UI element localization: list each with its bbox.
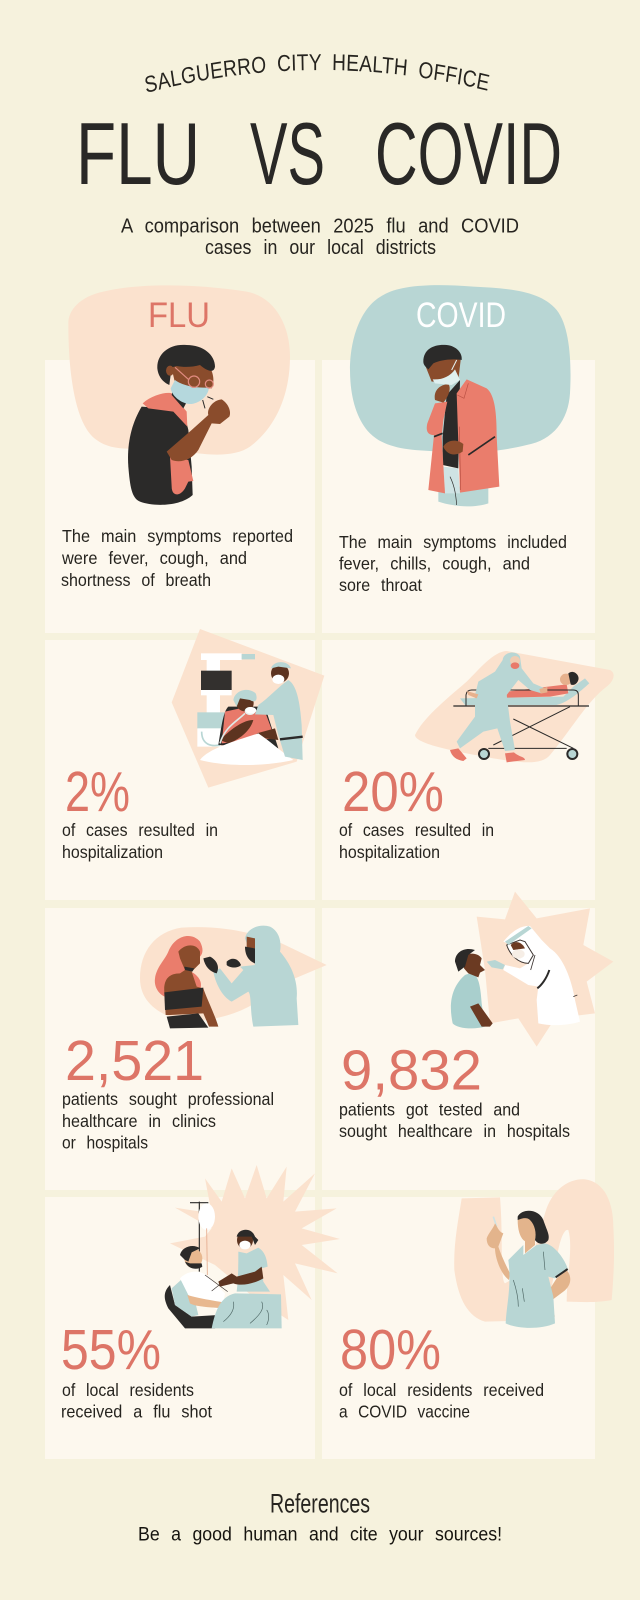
stat: flu shot: [61, 1318, 212, 1422]
illustration: person with covid symptoms: [350, 285, 571, 506]
stat: flu patients: healthcare in clinics: [62, 1111, 216, 1131]
subtitle: cases in our local districts: [205, 237, 436, 259]
column label: covid: COVID: [416, 296, 506, 335]
stat: flu shot: received a flu shot: [61, 1402, 212, 1422]
references heading: References: [270, 1488, 370, 1518]
text: covid symptoms: [339, 532, 567, 595]
stat: covid patients: sought healthcare in hospitals: [339, 1121, 570, 1141]
text: covid symptoms: sore throat: [339, 575, 422, 595]
stat: covid hospitalization: of cases resulted in: [339, 820, 494, 840]
text: covid symptoms: fever, chills, cough, and: [339, 554, 530, 574]
subtitle: A comparison between 2025 flu and COVID: [121, 216, 519, 238]
stat: covid patients: patients got tested and: [339, 1100, 520, 1120]
stat: covid patients: [339, 1038, 570, 1141]
illustration: patient with IV and nurse: [165, 1165, 340, 1328]
stat: covid vaccine: 80%: [340, 1318, 441, 1382]
title: VS: [250, 104, 325, 203]
stat: flu patients: 2,521: [65, 1029, 204, 1093]
title: [76, 104, 562, 203]
stat: flu patients: patients sought professional: [62, 1089, 274, 1109]
text: flu symptoms: were fever, cough, and: [61, 548, 247, 568]
panel: flu patients background: [45, 908, 315, 1190]
illustration: coughing person with flu: [68, 285, 290, 505]
panel: covid patients background: [322, 908, 595, 1190]
stat: flu shot: 55%: [61, 1318, 161, 1382]
text: flu symptoms: [61, 526, 293, 590]
column label: flu: FLU: [148, 296, 210, 335]
title: FLU: [76, 104, 200, 203]
panel: covid hospitalization background: [322, 640, 595, 900]
stat: flu hospitalization: 2%: [65, 760, 130, 824]
illustration: boy tested by worker in white suit: [451, 892, 613, 1047]
stat: covid hospitalization: 20%: [342, 760, 444, 824]
panel: flu symptoms background: [45, 360, 315, 633]
curved heading: health office: SALGUERRO CITY HEALTH OFFICE: [145, 54, 490, 92]
stat: flu hospitalization: hospitalization: [62, 842, 163, 862]
stat: covid vaccine: a COVID vaccine: [339, 1402, 470, 1422]
panel: covid symptoms background: [322, 360, 595, 633]
stat: flu patients: [62, 1029, 274, 1152]
illustration: patient on ventilator with doctor: [172, 629, 324, 788]
panel: flu shot background: [45, 1197, 315, 1459]
stat: covid patients: 9,832: [341, 1038, 482, 1102]
panel: flu hospitalization background: [45, 640, 315, 900]
stat: flu hospitalization: [62, 760, 218, 862]
stat: flu patients: or hospitals: [62, 1132, 148, 1152]
panel: covid vaccine background: [322, 1197, 595, 1459]
text: flu symptoms: shortness of breath: [61, 570, 211, 590]
stat: covid hospitalization: hospitalization: [339, 842, 440, 862]
illustration: nurse holding syringe: [454, 1179, 614, 1328]
references note: Be a good human and cite your sources!: [138, 1524, 502, 1546]
illustration: nose swab on woman: [140, 926, 327, 1028]
text: flu symptoms: The main symptoms reported: [62, 526, 293, 546]
text: covid symptoms: The main symptoms included: [339, 532, 567, 552]
illustration: worker pushing stretcher: [415, 651, 614, 762]
stat: flu hospitalization: of cases resulted in: [62, 820, 218, 840]
stat: covid hospitalization: [339, 760, 494, 862]
stat: covid vaccine: of local residents received: [339, 1380, 544, 1400]
subtitle: [121, 216, 519, 259]
stat: flu shot: of local residents: [62, 1380, 194, 1400]
stat: covid vaccine: [339, 1318, 544, 1422]
